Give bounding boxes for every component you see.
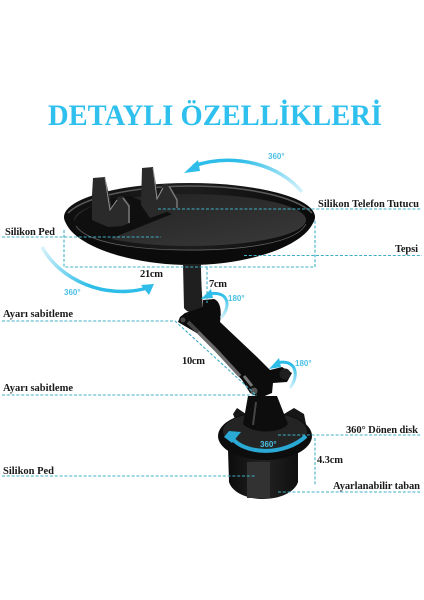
label: silikon ped top: Silikon Ped <box>5 227 55 238</box>
dimension lines <box>2 209 422 492</box>
arrow: lower joint 180 <box>269 358 295 388</box>
arrow: upper joint 180 <box>201 289 227 318</box>
arrow: disc rotation 360 <box>224 431 306 451</box>
product: round tray <box>64 183 315 265</box>
label: 180 lower: 180° <box>295 359 312 368</box>
label: silikon telefon tutucu: Silikon Telefon Tutucu <box>318 199 419 210</box>
label: ayari sabitleme lower: Ayarı sabitleme <box>3 383 73 394</box>
label: 180 upper: 180° <box>228 294 245 303</box>
label: 360 bottom: 360° <box>64 288 81 297</box>
label: 21cm: 21cm <box>140 269 163 280</box>
label: ayari sabitleme upper: Ayarı sabitleme <box>3 309 73 320</box>
label: 10cm: 10cm <box>182 356 205 367</box>
label: 360 donen disk: 360° Dönen disk <box>346 425 418 436</box>
product: cup holder base <box>218 396 312 499</box>
label: ayarlanabilir taban: Ayarlanabilir taban <box>333 481 420 492</box>
product: articulated arm <box>178 299 292 398</box>
label: tepsi: Tepsi <box>395 244 418 255</box>
arrow: tray rotation top <box>184 160 302 192</box>
label: 4.3cm: 4.3cm <box>317 455 343 466</box>
title: DETAYLI ÖZELLİKLERİ <box>48 99 382 132</box>
arrow: tray rotation bottom <box>42 247 154 295</box>
label: silikon ped bottom: Silikon Ped <box>3 466 54 477</box>
product: silicone phone holders <box>92 167 178 227</box>
label: 360 on disc: 360° <box>260 440 277 449</box>
product: vertical pole <box>183 264 203 312</box>
label: 360 top: 360° <box>268 152 285 161</box>
label: 7cm: 7cm <box>209 279 227 290</box>
